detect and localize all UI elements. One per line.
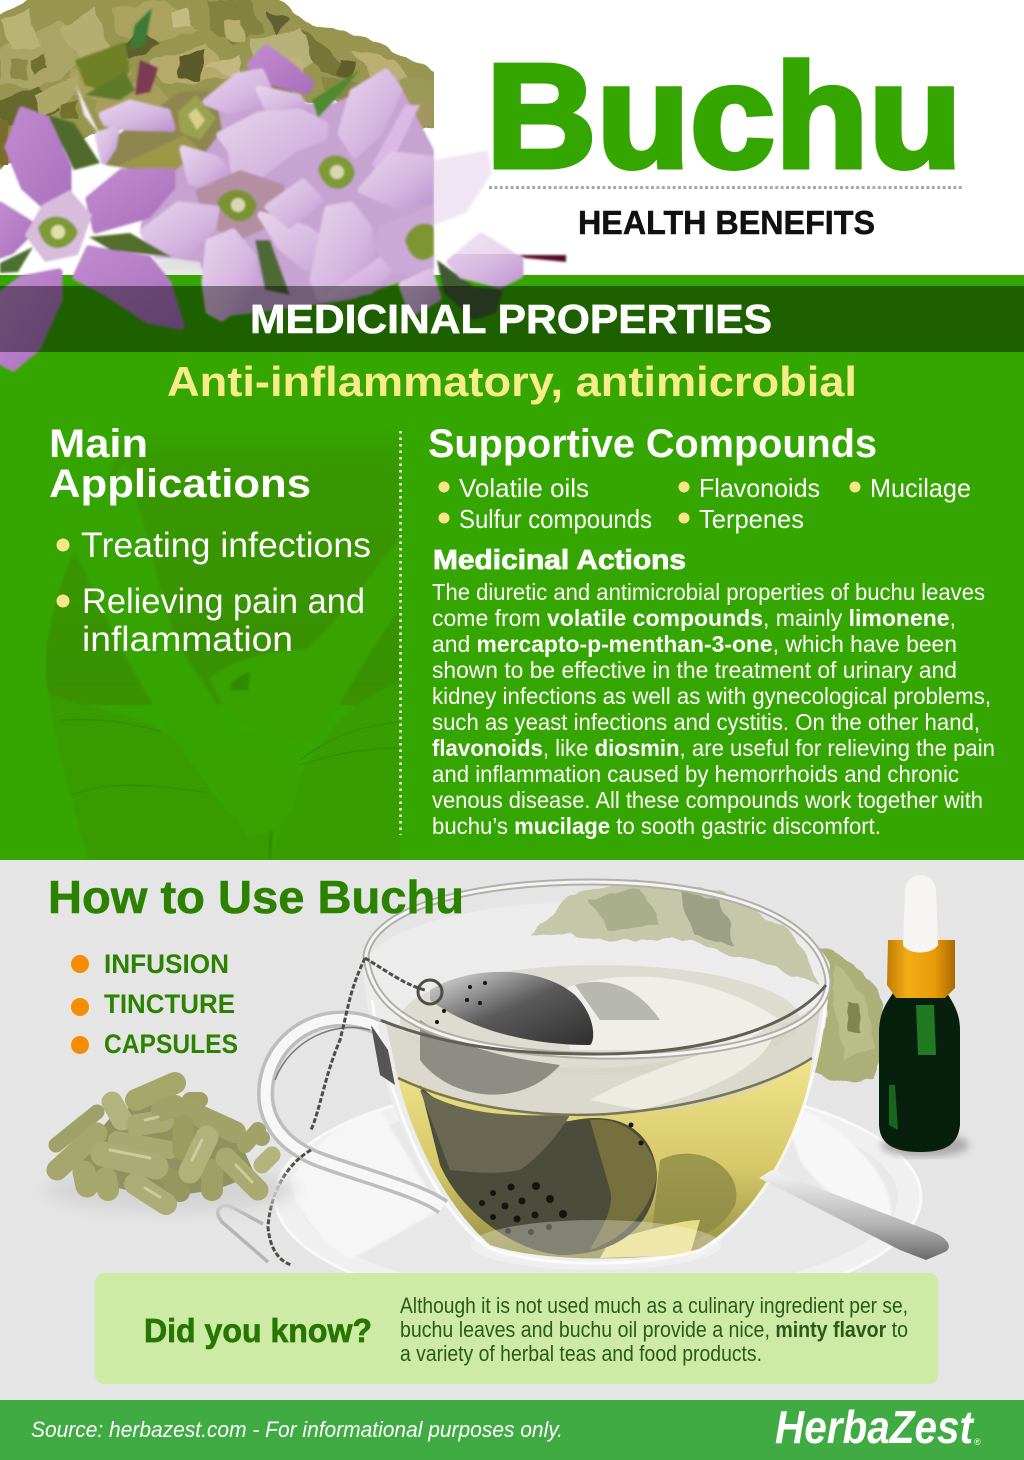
shorts and legs <box>49 695 270 860</box>
paragraph: medicinal actions: such as yeast infections and cystitis. On the other hand, <box>432 709 980 735</box>
heading: did you know: Did you know? <box>144 1312 372 1349</box>
title divider dotted line <box>489 186 962 189</box>
white shadow below flowers <box>120 235 350 275</box>
paragraph: medicinal actions: venous disease. All these compounds work together with <box>432 787 983 813</box>
paragraph: medicinal actions: and inflammation caused by hemorrhoids and chronic <box>432 761 959 787</box>
photo: leaf pile behind cup <box>810 948 886 1082</box>
footer <box>0 1400 1024 1460</box>
cup rim <box>366 882 828 1056</box>
paragraph: medicinal actions: The diuretic and antimicrobial properties of buchu leaves <box>432 579 985 605</box>
capsule highlights <box>110 1117 252 1197</box>
capsule shade underlay <box>75 1095 255 1198</box>
heading: supportive compounds: Supportive Compounds <box>428 422 877 466</box>
source note: Source: herbazest.com - For informational purposes only. <box>31 1417 563 1442</box>
bullet list: compounds: Flavonoids <box>699 473 820 503</box>
photo: glass tea cup <box>218 880 949 1270</box>
big left purple flower <box>0 110 181 368</box>
dried leaves seen through glass <box>532 880 820 985</box>
infuser holes <box>435 981 644 1235</box>
cup handle <box>266 1019 443 1207</box>
tea liquid <box>397 1058 812 1258</box>
paragraph: medicinal actions: come from volatile compounds, mainly limonene, <box>432 605 956 631</box>
heading: how to use buchu: How to Use Buchu <box>48 871 464 923</box>
heading: medicinal actions: Medicinal Actions <box>433 544 686 575</box>
heading: medicinal properties: MEDICINAL PROPERTIES <box>250 296 772 342</box>
tea inner upper area <box>400 965 800 1075</box>
torso <box>45 425 400 705</box>
small purple rear flower <box>250 48 311 91</box>
logo: herbazest: ® <box>974 1437 981 1447</box>
heading: main applications: Applications <box>49 462 311 506</box>
flower mass base <box>140 75 434 318</box>
infuser clip <box>218 1206 268 1262</box>
photo: dropper bottle <box>879 875 969 1157</box>
heading: main applications <box>49 422 311 506</box>
bullet list: applications: inflammation <box>82 620 293 659</box>
bottle body <box>879 990 960 1152</box>
bullet list: compounds: Terpenes <box>699 504 804 534</box>
bullet list: compounds: Sulfur compounds <box>459 504 652 534</box>
hand and second arm <box>210 540 400 705</box>
paragraph: medicinal actions <box>432 579 995 839</box>
background flower stems and leaves <box>75 8 360 175</box>
illustration: woman silhouette tinted green <box>45 425 400 860</box>
panel: medicinal properties green background <box>0 275 1024 860</box>
callout: did you know <box>95 1273 938 1384</box>
photo: buchu flowers <box>0 8 566 368</box>
spoon <box>759 1170 949 1260</box>
bullet list: compounds <box>438 473 971 534</box>
column divider dotted <box>399 431 402 835</box>
centre flower <box>143 170 342 318</box>
band above liquid <box>385 1000 822 1115</box>
dark band <box>0 286 1024 352</box>
dropper bulb <box>903 875 938 952</box>
list: forms of use <box>71 949 238 1059</box>
paragraph: did you know <box>400 1293 908 1366</box>
bottle collar <box>887 940 955 998</box>
cup outline glass <box>372 1000 826 1263</box>
column: supportive compounds <box>428 422 995 839</box>
item: infusion: INFUSION <box>104 949 229 979</box>
back pale flower <box>98 72 325 188</box>
paragraph: medicinal actions: flavonoids, like diosmin, are useful for relieving the pain <box>432 735 995 761</box>
paragraph: did you know: a variety of herbal teas and food products. <box>400 1341 762 1366</box>
lower-right flower <box>331 150 566 320</box>
bullet list: compounds: Volatile oils <box>459 473 589 503</box>
tea infuser ball <box>420 972 657 1255</box>
photo: dried buchu leaves <box>0 0 440 172</box>
paragraph: medicinal actions: kidney infections as well as with gynecological problems, <box>432 683 991 709</box>
bullet list: applications <box>56 526 371 659</box>
fist <box>190 740 302 838</box>
bullet list: applications: Relieving pain and <box>82 582 365 621</box>
heading: main applications: Main <box>49 422 148 466</box>
infuser chain <box>268 958 442 1265</box>
photo: capsules <box>45 1083 295 1212</box>
panel: how to use <box>0 860 1024 1400</box>
paragraph: medicinal actions: shown to be effective in the treatment of urinary and <box>432 657 957 683</box>
fade over flower beyond the photo edge <box>434 130 564 254</box>
photo: saucer <box>275 1079 921 1315</box>
subheading: anti-inflammatory: Anti-inflammatory, antimicrobial <box>167 358 857 405</box>
arm <box>76 466 216 705</box>
logo: herbazest: HerbaZest <box>775 1401 974 1453</box>
paragraph: medicinal actions: buchu’s mucilage to sooth gastric discomfort. <box>432 813 881 839</box>
column: main applications <box>49 422 371 659</box>
paragraph: medicinal actions: and mercapto-p-menthan-3-one, which have been <box>432 631 957 657</box>
item: capsules: CAPSULES <box>104 1029 238 1059</box>
bullet list: compounds: Mucilage <box>870 473 971 503</box>
bullet list: applications: Treating infections <box>81 526 371 565</box>
item: tincture: TINCTURE <box>104 989 235 1019</box>
subtitle: HEALTH BENEFITS <box>578 204 875 241</box>
paragraph: did you know: Although it is not used much as a culinary ingredient per se, <box>400 1293 908 1318</box>
cup back wall <box>363 901 830 1258</box>
paragraph: did you know: buchu leaves and buchu oil provide a nice, minty flavor to <box>400 1317 908 1342</box>
title: Buchu <box>486 34 962 199</box>
right flower <box>268 72 430 298</box>
